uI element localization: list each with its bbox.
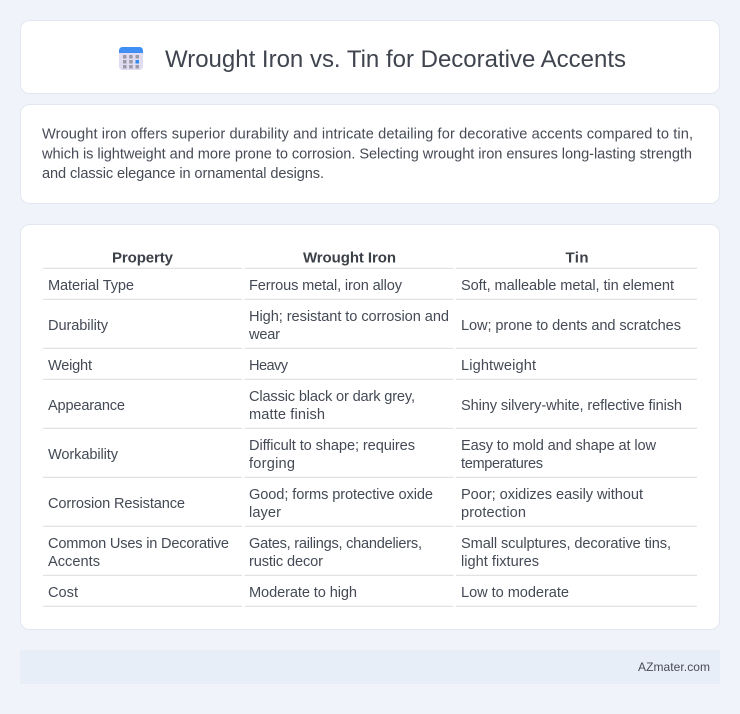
row: material type: Soft, malleable metal, tin element: [461, 278, 674, 294]
table header row: Property: [112, 250, 174, 266]
row: material type: Material Type: [48, 278, 134, 294]
row: cost: Low to moderate: [461, 585, 569, 601]
row: appearance: matte finish: [249, 407, 325, 423]
row: weight: Weight: [48, 358, 92, 374]
row: workability: Workability: [48, 447, 119, 463]
intro text: which is lightweight and more prone to corrosion. Selecting wrought iron ensures long-lasting strength: [41, 146, 692, 162]
row: workability: temperatures: [461, 456, 543, 472]
row: common uses: rustic decor: [249, 554, 323, 570]
row: weight: Lightweight: [461, 358, 536, 374]
row: cost: [48, 585, 569, 601]
table header row: Wrought Iron: [303, 250, 396, 266]
row: corrosion resistance: protection: [461, 505, 526, 521]
row: corrosion resistance: layer: [249, 505, 281, 521]
row: corrosion resistance: [48, 487, 643, 521]
row: common uses: Small sculptures, decorative tins,: [461, 536, 671, 552]
footer bar: [20, 650, 720, 684]
row: common uses: Common Uses in Decorative: [48, 536, 229, 552]
intro text: Wrought iron offers superior durability and intricate detailing for decorative accents compared to tin,: [42, 126, 693, 142]
row: corrosion resistance: Poor; oxidizes easily without: [461, 487, 643, 503]
footer credit: AZmater.com: [638, 660, 710, 674]
row: material type: Ferrous metal, iron alloy: [249, 278, 403, 294]
title: Wrought Iron vs. Tin for Decorative Accents: [165, 46, 626, 73]
row: appearance: Classic black or dark grey,: [249, 389, 415, 405]
row: workability: Difficult to shape; requires: [249, 438, 415, 454]
icon: calendar: [119, 47, 143, 70]
panel: title header: [20, 20, 720, 94]
table header row: [112, 250, 588, 266]
row: durability: Durability: [48, 318, 109, 334]
row: cost: Cost: [48, 585, 78, 601]
row: durability: wear: [248, 327, 280, 343]
row: durability: Low; prone to dents and scratches: [461, 318, 681, 334]
row: weight: [48, 358, 536, 374]
row: workability: forging: [249, 456, 295, 472]
row: weight: Heavy: [249, 358, 289, 374]
row: common uses: [48, 536, 671, 570]
panel: introduction: [20, 104, 720, 204]
row: cost: Moderate to high: [249, 585, 357, 601]
row: corrosion resistance: Corrosion Resistance: [48, 496, 185, 512]
row: common uses: light fixtures: [461, 554, 539, 570]
row: material type: [48, 278, 674, 294]
row: corrosion resistance: Good; forms protective oxide: [249, 487, 433, 503]
intro text: and classic elegance in ornamental designs.: [42, 166, 324, 182]
row: workability: Easy to mold and shape at low: [461, 438, 656, 454]
row: common uses: Accents: [48, 554, 100, 570]
row: durability: High; resistant to corrosion and: [249, 309, 449, 325]
table header row: Tin: [566, 250, 588, 266]
intro text: [41, 126, 693, 182]
row: common uses: Gates, railings, chandeliers,: [249, 536, 422, 552]
row: appearance: Shiny silvery-white, reflective finish: [461, 398, 682, 414]
row: workability: [48, 438, 656, 472]
row: appearance: [48, 389, 682, 423]
panel: comparison table: [20, 224, 720, 630]
row: appearance: Appearance: [48, 398, 125, 414]
row: durability: [48, 309, 681, 343]
